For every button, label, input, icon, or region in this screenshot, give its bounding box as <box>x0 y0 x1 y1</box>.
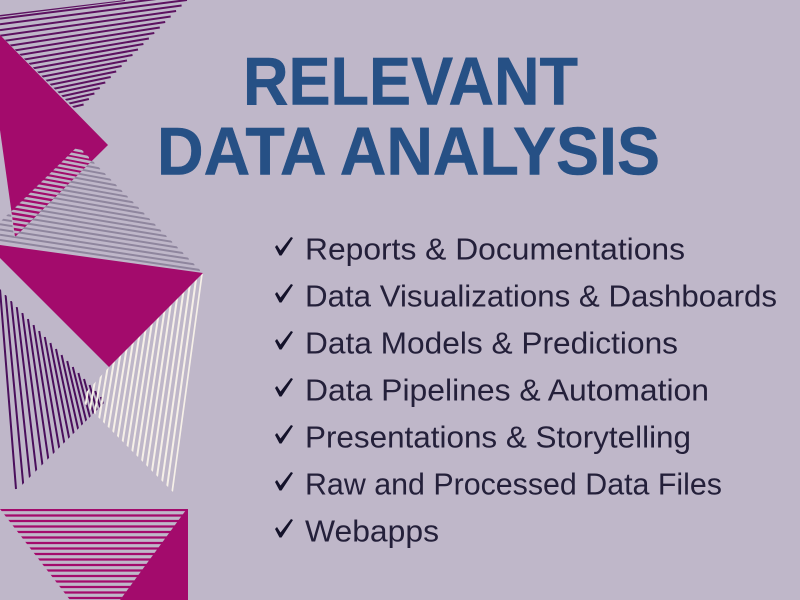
item: presentations: Presentations & Storytelling <box>305 420 691 454</box>
dark striped triangle left <box>0 289 104 490</box>
magenta striped triangle bottom <box>0 510 190 598</box>
title line 1: RELEVANT <box>243 44 578 120</box>
cream striped kite <box>84 273 203 492</box>
title <box>157 44 660 190</box>
stripes over magenta kite <box>11 148 92 237</box>
item: models: Data Models & Predictions <box>305 326 678 360</box>
item: pipelines: Data Pipelines & Automation <box>305 372 709 408</box>
magenta triangle bottom right <box>120 509 188 600</box>
grey striped triangle <box>0 135 200 270</box>
title line 2: DATA ANALYSIS <box>157 114 660 190</box>
item: data files: Raw and Processed Data Files <box>305 466 722 502</box>
item: visualizations: Data Visualizations & Dashboards <box>305 278 777 314</box>
magenta kite top <box>0 35 108 237</box>
item: reports: Reports & Documentations <box>305 232 685 266</box>
dark striped triangle top <box>0 0 188 108</box>
magenta kite middle <box>0 245 203 367</box>
decorative geometric shapes <box>0 0 203 600</box>
item: webapps: Webapps <box>305 514 439 548</box>
checklist <box>275 232 777 548</box>
